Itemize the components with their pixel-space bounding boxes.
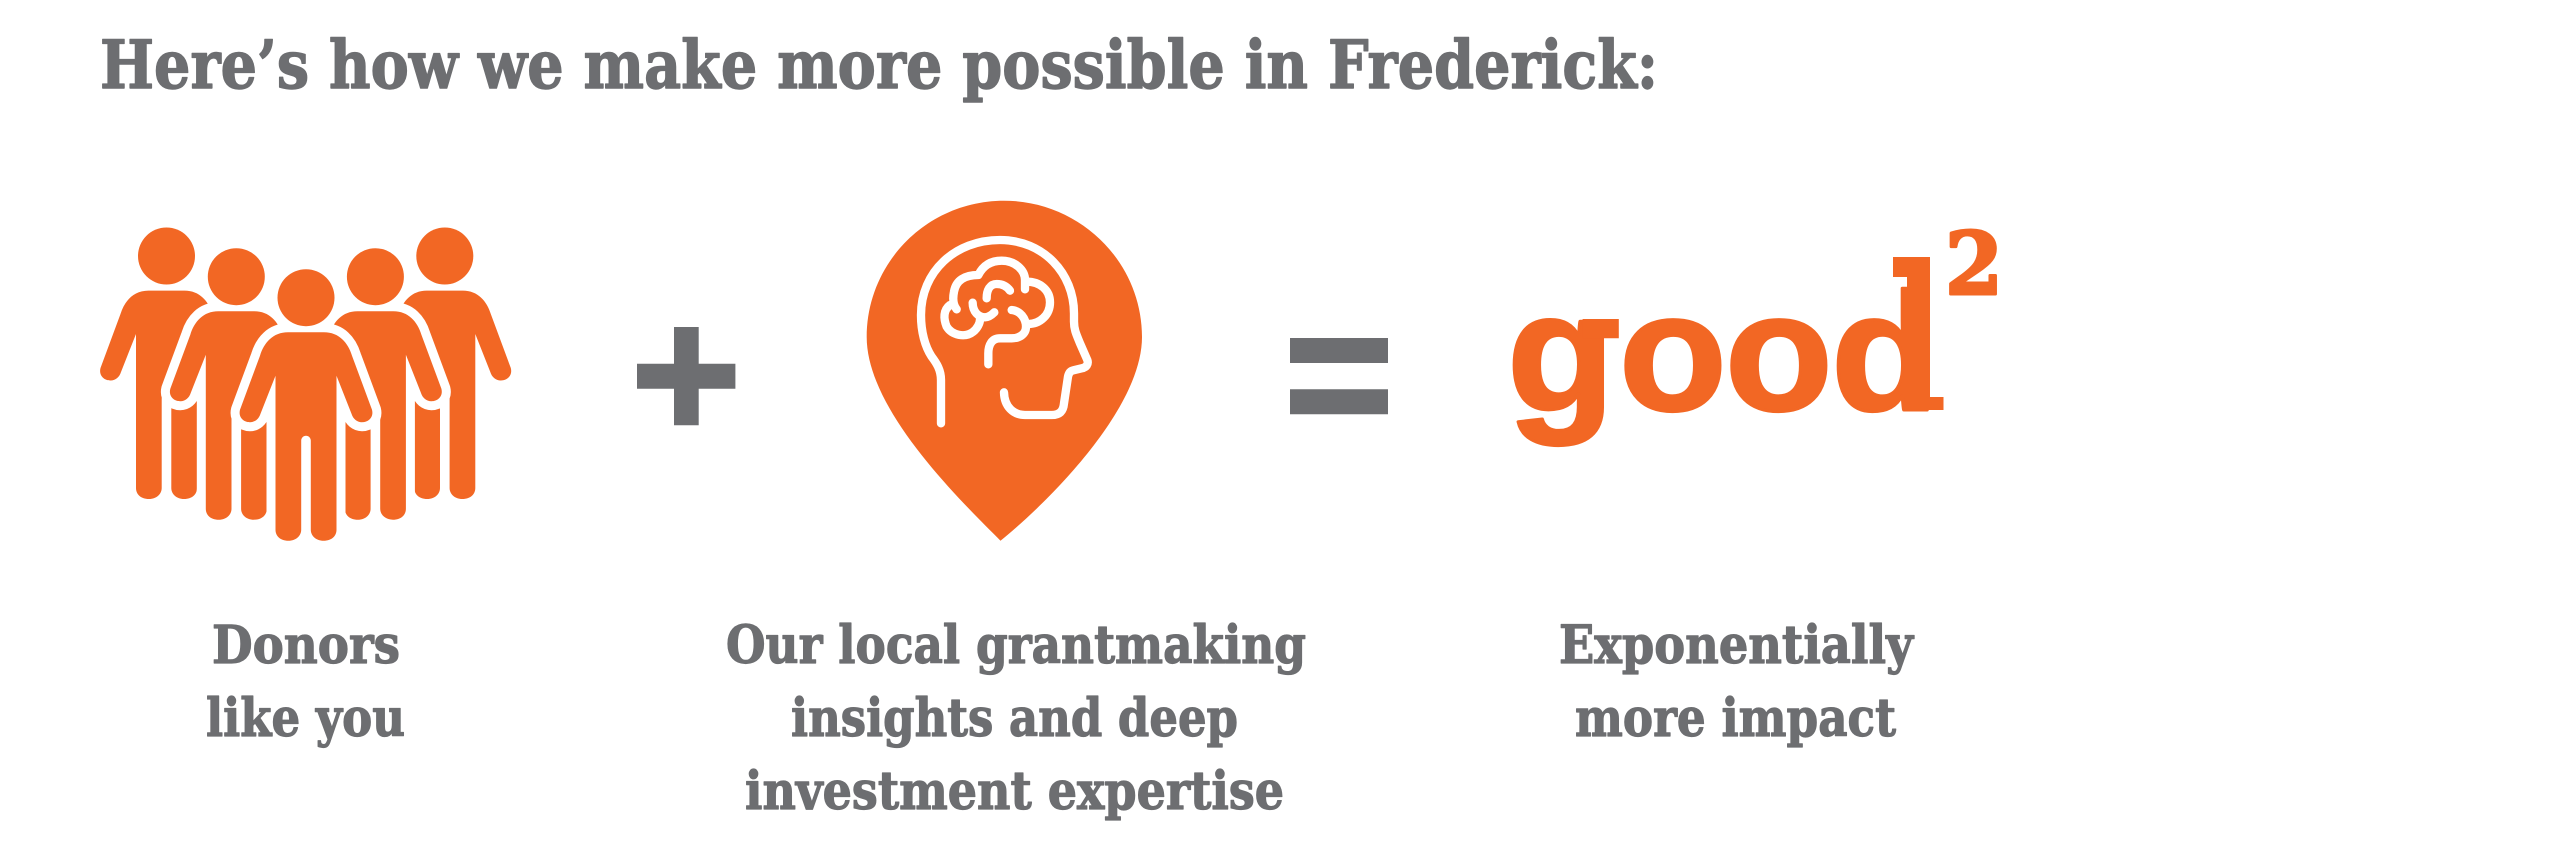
label: local grantmaking insights and investment expertise: insights and deep: [791, 688, 1238, 749]
logo: good squared: good: [1507, 258, 1939, 446]
icon: equals sign: [1290, 338, 1388, 414]
label: donors like you: [206, 615, 405, 749]
icon: plus sign: [637, 327, 735, 425]
label: exponentially more impact: [1559, 615, 1915, 749]
label: donors like you: like you: [206, 688, 405, 749]
label: local grantmaking insights and investment expertise: [726, 615, 1306, 822]
logo: good squared: 2: [1945, 214, 2003, 315]
label: local grantmaking insights and investment expertise: investment expertise: [745, 761, 1284, 822]
title: Here’s how we make more possible in Frederick:: [100, 26, 1658, 104]
label: exponentially more impact: more impact: [1575, 688, 1896, 749]
label: donors like you: Donors: [212, 615, 400, 676]
icon: group of donors: [100, 228, 511, 541]
label: exponentially more impact: Exponentially: [1559, 615, 1915, 676]
label: local grantmaking insights and investment expertise: Our local grantmaking: [726, 615, 1306, 676]
icon: location pin with head and brain: [867, 201, 1142, 541]
